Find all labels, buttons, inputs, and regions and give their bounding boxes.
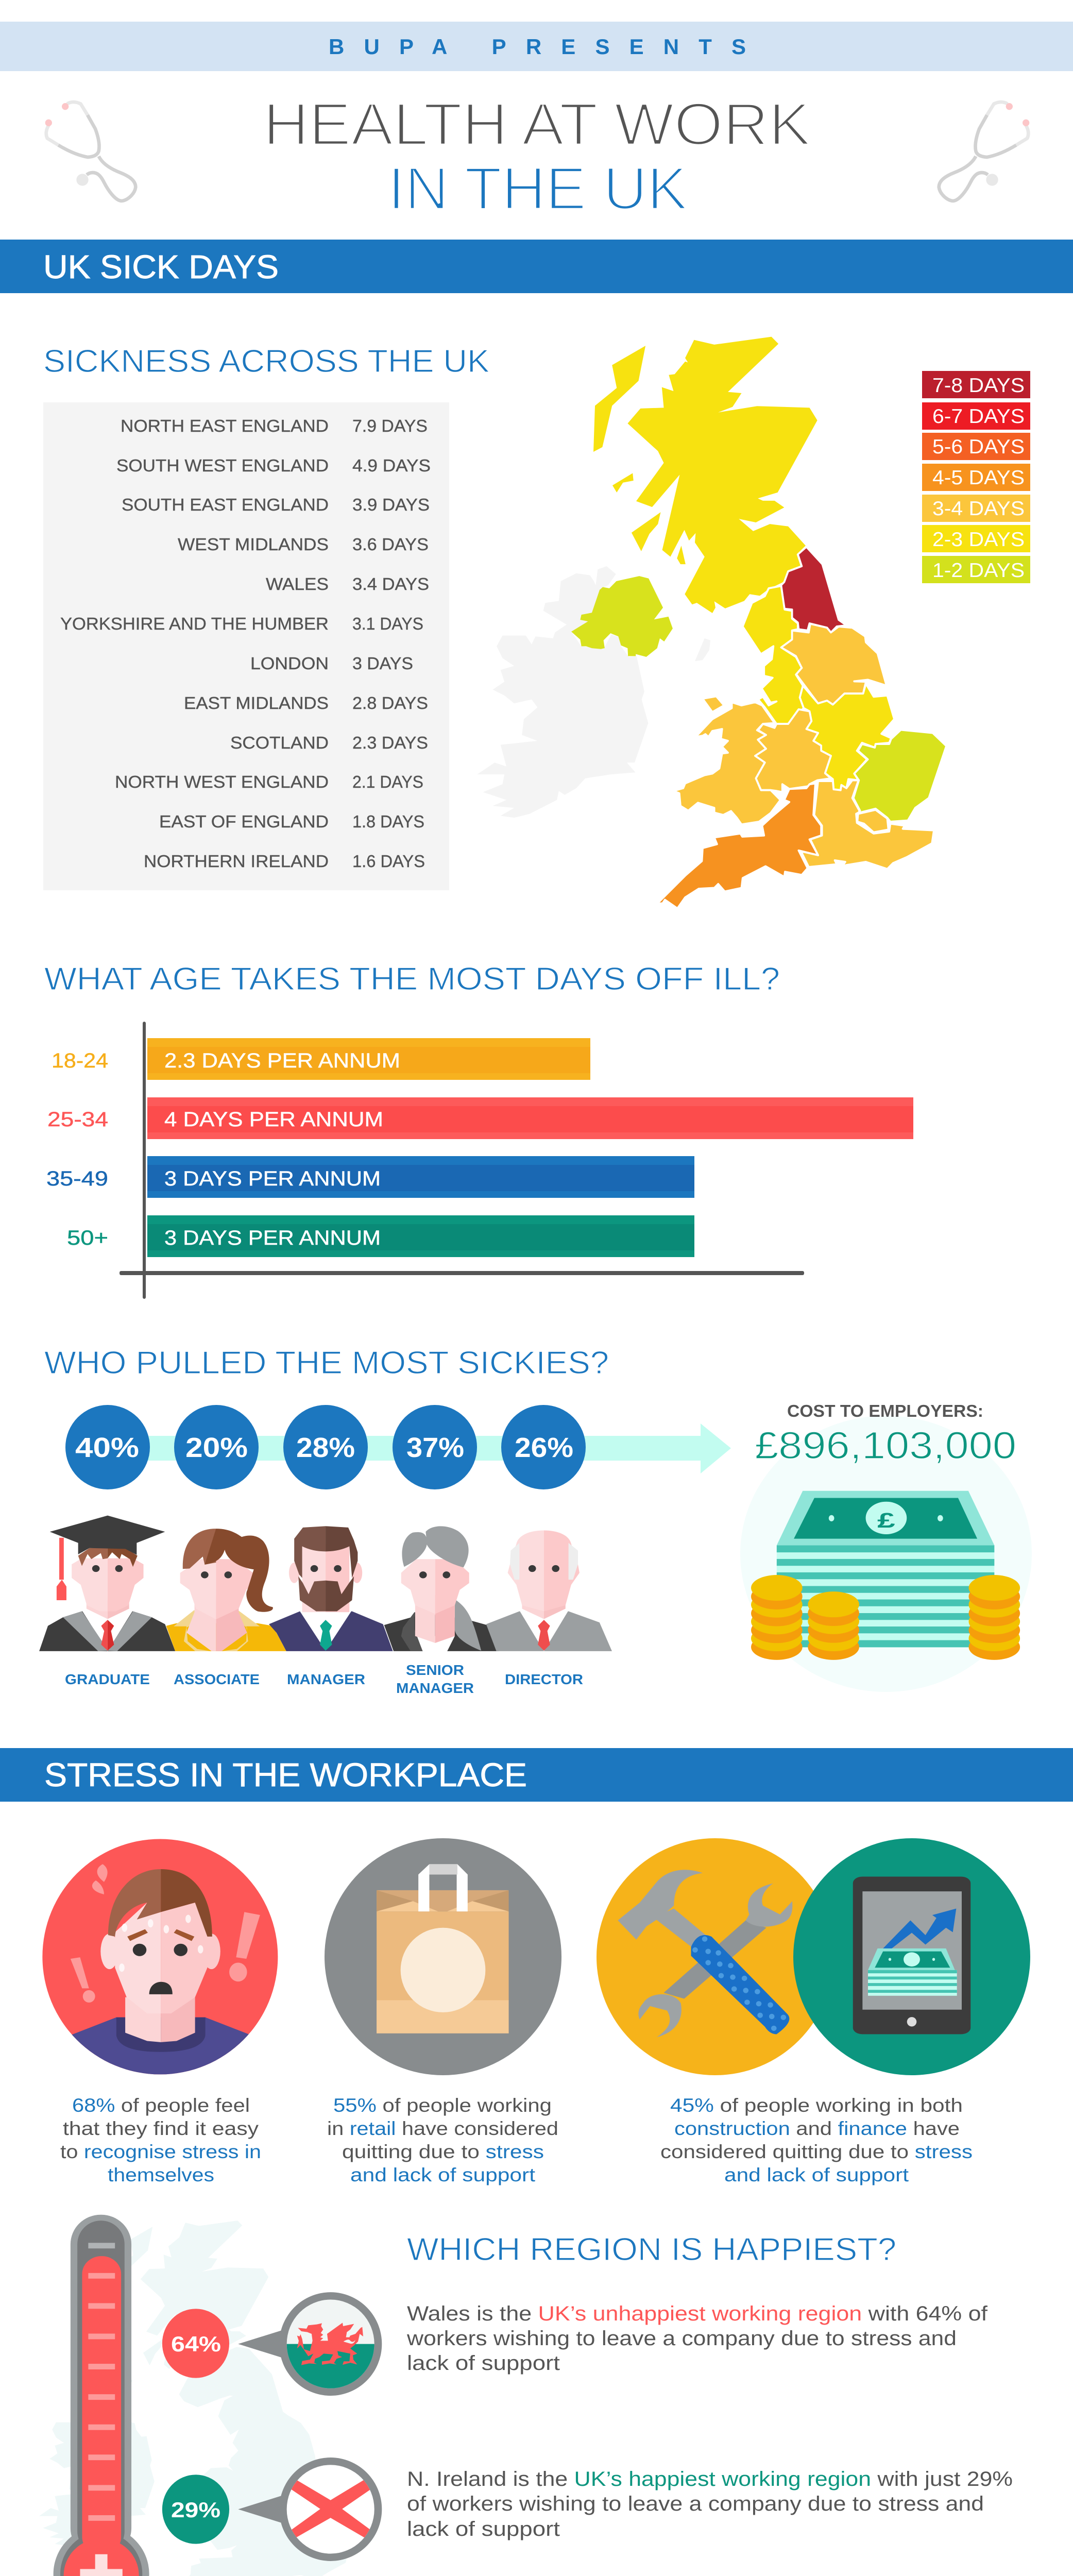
map: UK regions choropleth	[477, 337, 946, 908]
icon circle: retail bag	[325, 1838, 561, 2075]
table: days by region: SCOTLAND	[230, 733, 329, 752]
text: Northern Ireland	[407, 2468, 1013, 2540]
thermometer and region callouts	[54, 2215, 382, 2576]
text: construction and finance quitting: and lack of support	[724, 2164, 909, 2185]
table: days by region: 3.6 DAYS	[352, 535, 429, 554]
heading: which region is happiest: WHICH REGION IS HAPPIEST?	[407, 2232, 896, 2267]
top banner: Bupa presents	[0, 22, 1073, 71]
role labels: SENIOR	[406, 1662, 464, 1678]
icon: stressed person	[42, 1839, 278, 2086]
person: director	[486, 1531, 612, 1651]
bar: 25-34: 4 DAYS PER ANNUM	[164, 1108, 383, 1131]
table: days by region: 3.1 DAYS	[352, 614, 423, 633]
text: retail quitting: and lack of support	[350, 2164, 536, 2185]
bar: 50+: 50+	[67, 1227, 108, 1249]
bar chart: days off by age	[46, 1022, 913, 1299]
role labels: GRADUATE	[65, 1671, 150, 1687]
role labels	[65, 1662, 583, 1696]
legend: days ranges: 1-2 DAYS	[932, 560, 1025, 582]
callout: Northern Ireland	[162, 2458, 382, 2561]
section header: stress in the workplace: STRESS IN THE WORKPLACE	[44, 1756, 527, 1793]
table: days by region: WEST MIDLANDS	[178, 535, 329, 554]
role labels: ASSOCIATE	[174, 1671, 260, 1687]
table: days by region: YORKSHIRE AND THE HUMBER	[60, 614, 329, 633]
text: Wales: workers wishing to leave a company due to stress and	[406, 2327, 957, 2350]
top banner: Bupa presents: BUPA PRESENTS	[329, 35, 746, 59]
legend: days ranges: 3-4 DAYS	[932, 498, 1025, 520]
people illustrations	[39, 1516, 612, 1651]
icon: money and coins	[751, 1491, 1020, 1660]
text: construction and finance quitting	[660, 2095, 973, 2185]
table: days by region: LONDON	[250, 654, 329, 673]
table: days by region: EAST MIDLANDS	[184, 693, 329, 713]
table: days by region: 3.4 DAYS	[352, 574, 429, 594]
text: construction and finance quitting: 45% of people working in both	[670, 2095, 963, 2116]
bar: 35-49: 35-49	[46, 1167, 108, 1190]
role labels: MANAGER	[287, 1671, 365, 1687]
legend: days ranges: 2-3 DAYS	[932, 529, 1025, 551]
title	[263, 91, 811, 222]
table: days by region: 2.3 DAYS	[352, 733, 428, 752]
title: HEALTH AT WORK	[263, 91, 811, 158]
bar: 50+	[67, 1215, 694, 1257]
role labels: DIRECTOR	[505, 1671, 583, 1687]
table: days by region: 3.9 DAYS	[352, 495, 430, 514]
legend: days ranges: 4-5 DAYS	[932, 467, 1025, 489]
section header: UK sick days: UK SICK DAYS	[43, 248, 279, 285]
legend: days ranges: 7-8 DAYS	[932, 375, 1025, 397]
percentages per role: 28%	[296, 1432, 355, 1463]
callout values	[171, 2332, 221, 2522]
percentages per role: 40%	[75, 1432, 139, 1463]
table: days by region: 3 DAYS	[352, 654, 413, 673]
percentages per role	[65, 1405, 586, 1489]
faint UK map behind thermometer	[39, 2221, 355, 2576]
icon circle: construction tools	[597, 1838, 833, 2075]
legend: days ranges	[922, 371, 1030, 583]
section header: UK sick days	[0, 240, 1073, 293]
cost to employers: £896,103,000	[755, 1424, 1016, 1467]
text: construction and finance quitting: construction and finance have	[674, 2118, 960, 2139]
table: days by region: 4.9 DAYS	[352, 456, 431, 475]
text: recognise stress: themselves	[108, 2164, 214, 2185]
icon: stethoscope right	[939, 102, 1029, 201]
cost to employers	[740, 1401, 1032, 1692]
callout values: 64%	[171, 2332, 221, 2356]
text: recognise stress: that they find it easy	[63, 2118, 259, 2139]
table: days by region: WALES	[266, 574, 329, 594]
text: Wales: Wales is the UK’s unhappiest working region with 64% of	[407, 2302, 988, 2325]
bar: 18-24	[52, 1038, 590, 1080]
role labels: MANAGER	[396, 1680, 474, 1696]
icon: money and coins: £	[877, 1509, 895, 1532]
text: recognise stress: 68% of people feel	[72, 2095, 250, 2116]
heading: sickness across the UK: SICKNESS ACROSS THE UK	[43, 344, 489, 379]
table: days by region	[43, 402, 449, 890]
text: retail quitting: in retail have considered	[327, 2118, 558, 2139]
bar: 35-49: 3 DAYS PER ANNUM	[164, 1167, 381, 1190]
bar: 25-34	[47, 1097, 913, 1139]
legend: days ranges: 6-7 DAYS	[932, 405, 1025, 428]
heading: who pulled the most sickies: WHO PULLED THE MOST SICKIES?	[44, 1345, 609, 1381]
person: senior manager	[384, 1526, 499, 1651]
icon: Welsh dragon	[297, 2323, 363, 2365]
callout: Wales	[162, 2292, 382, 2396]
table: days by region: EAST OF ENGLAND	[159, 812, 329, 831]
bar: 18-24: 2.3 DAYS PER ANNUM	[164, 1049, 400, 1072]
bar: 25-34: 25-34	[47, 1108, 108, 1131]
text: Northern Ireland: lack of support	[407, 2518, 560, 2540]
text: recognise stress: to recognise stress in	[60, 2141, 261, 2162]
table: days by region: 2.1 DAYS	[352, 772, 423, 791]
table: days by region: SOUTH WEST ENGLAND	[116, 456, 329, 475]
text: retail quitting	[327, 2095, 558, 2185]
table: days by region: 7.9 DAYS	[352, 416, 428, 435]
percentages per role: 20%	[185, 1432, 248, 1463]
text: Northern Ireland: N. Ireland is the UK’s happiest working region with just 29%	[407, 2468, 1013, 2490]
person: manager	[269, 1526, 393, 1651]
table: days by region: 1.8 DAYS	[352, 812, 424, 831]
bar: 35-49	[46, 1156, 694, 1198]
table: days by region: NORTH EAST ENGLAND	[121, 416, 329, 435]
title: IN THE UK	[388, 155, 688, 222]
text: recognise stress	[60, 2095, 261, 2185]
callout values: 29%	[171, 2498, 220, 2522]
section header: stress in the workplace	[0, 1748, 1073, 1802]
person: associate	[166, 1529, 286, 1651]
percentages per role: 26%	[515, 1432, 573, 1463]
heading: what age takes the most days off ill: WHAT AGE TAKES THE MOST DAYS OFF ILL?	[44, 961, 780, 997]
percentages per role: 37%	[406, 1432, 464, 1463]
bar: 18-24: 18-24	[52, 1049, 108, 1072]
icon circle: finance tablet	[793, 1838, 1030, 2075]
table: days by region: NORTH WEST ENGLAND	[115, 772, 329, 791]
text: retail quitting: quitting due to stress	[342, 2141, 544, 2162]
table: days by region: SOUTH EAST ENGLAND	[122, 495, 329, 514]
text: Wales	[406, 2302, 988, 2375]
text: Northern Ireland: of workers wishing to leave a company due to stress and	[407, 2493, 984, 2515]
text: retail quitting: 55% of people working	[333, 2095, 552, 2116]
text: Wales: lack of support	[407, 2352, 560, 2375]
cost to employers: COST TO EMPLOYERS:	[787, 1401, 983, 1420]
person: graduate	[39, 1516, 175, 1651]
text: construction and finance quitting: considered quitting due to stress	[660, 2141, 973, 2162]
table: days by region: 1.6 DAYS	[352, 852, 425, 871]
table: days by region: 2.8 DAYS	[352, 693, 428, 713]
bar: 50+: 3 DAYS PER ANNUM	[164, 1227, 381, 1249]
table: days by region: NORTHERN IRELAND	[144, 852, 329, 871]
thermometer	[54, 2215, 149, 2576]
icon: stethoscope left	[45, 102, 135, 201]
legend: days ranges: 5-6 DAYS	[932, 436, 1025, 458]
arrow: sickies to cost	[118, 1423, 731, 1473]
